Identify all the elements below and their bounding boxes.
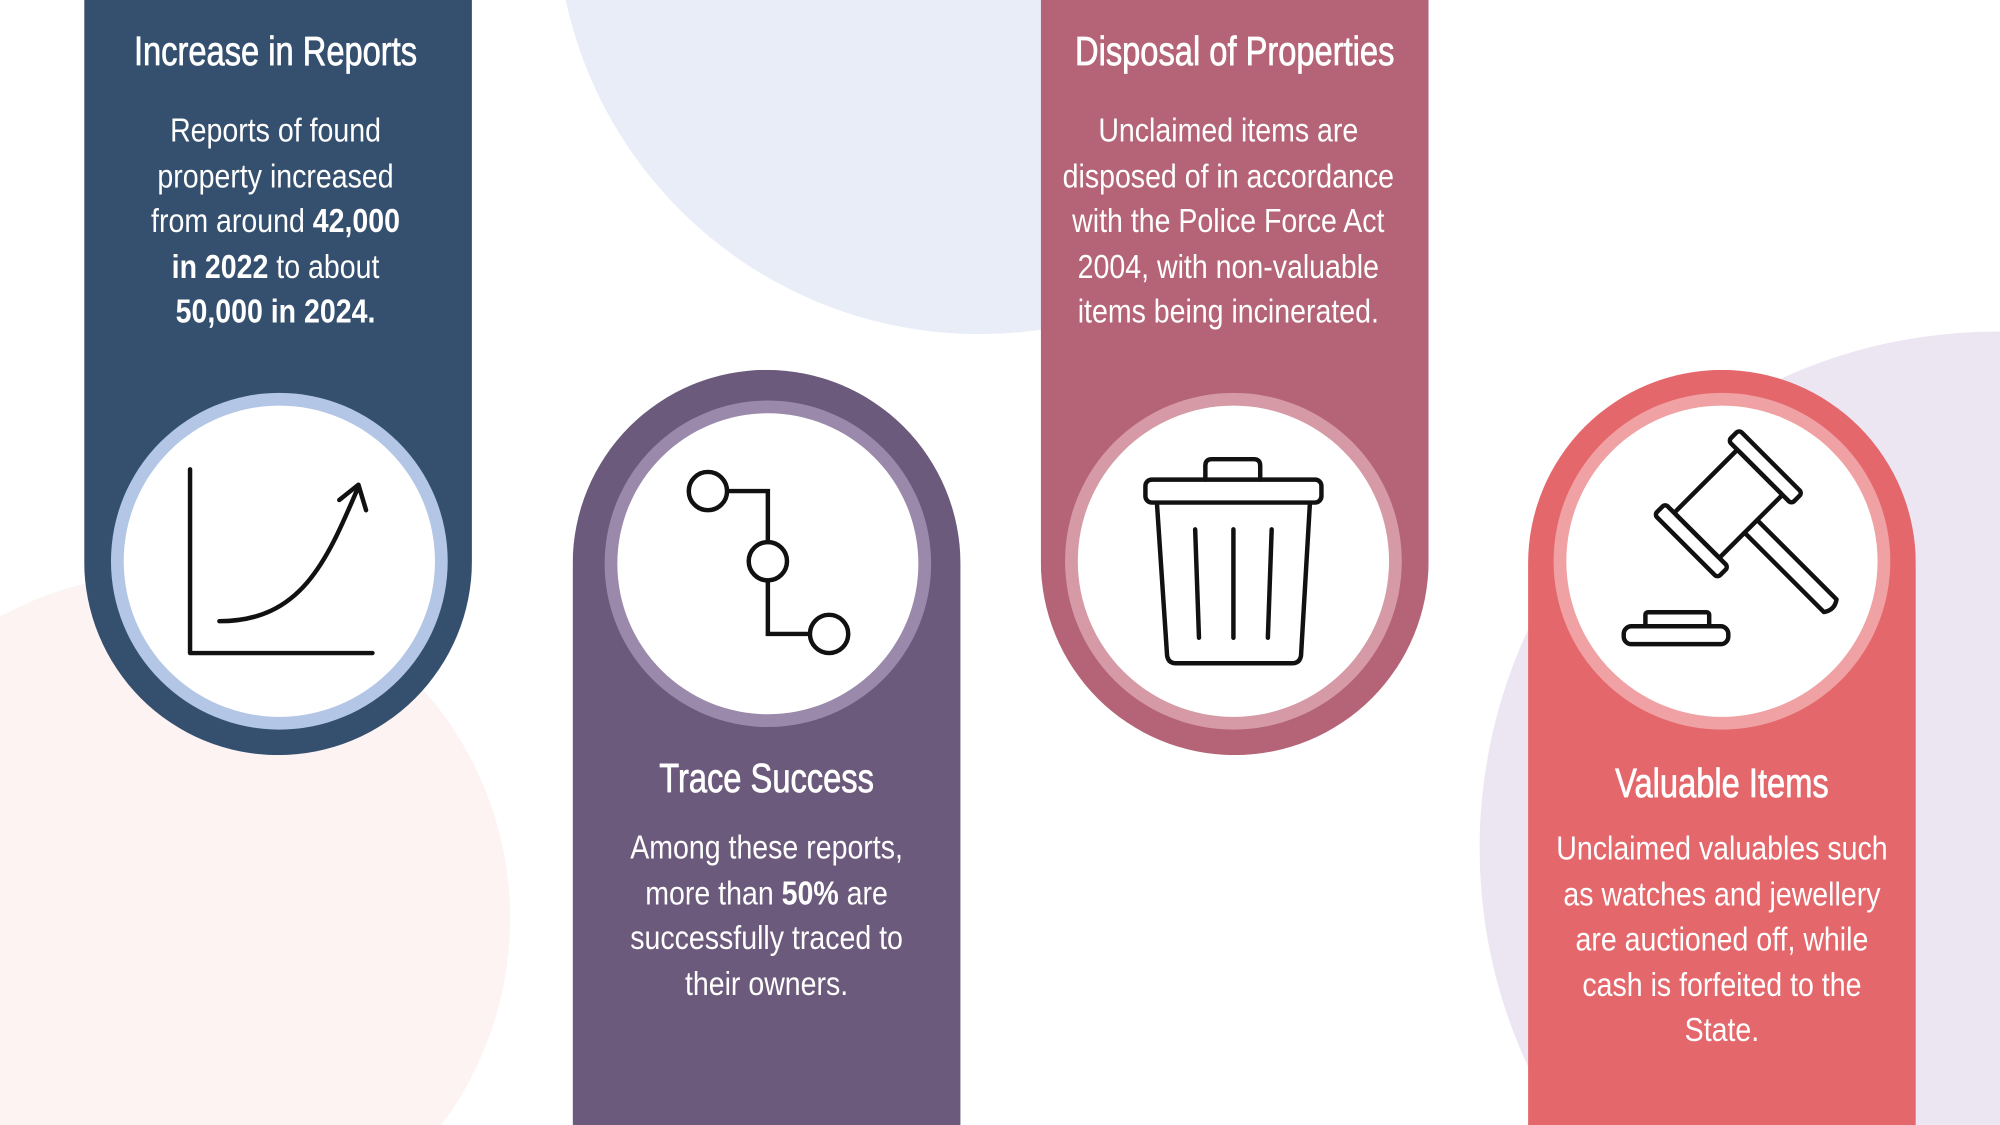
icon: path nodes [686, 470, 850, 656]
text: increase in reports: property increased [157, 156, 394, 195]
title: disposal of properties: Disposal of Properties [1075, 28, 1394, 74]
text: increase in reports: from around 42,000 [151, 202, 400, 240]
text: trace success: their owners. [685, 964, 848, 1002]
title: trace success: Trace Success [659, 755, 874, 801]
text: disposal of properties: items being incinerated. [1078, 292, 1379, 330]
text: increase in reports: Reports of found [170, 111, 381, 149]
text: disposal of properties: 2004, with non-valuable [1078, 247, 1379, 285]
icon: growth chart [188, 467, 375, 656]
text: disposal of properties [1063, 111, 1394, 330]
text: disposal of properties: with the Police Force Act [1072, 202, 1384, 240]
text: increase in reports: in 2022 to about [172, 247, 379, 285]
panel: valuable items [1528, 370, 1916, 1125]
icon: trash can [1143, 457, 1324, 666]
icon: gavel [1622, 429, 1839, 646]
text: valuable items: Unclaimed valuables such [1556, 829, 1888, 867]
text: trace success: more than 50% are [645, 873, 888, 911]
title: increase in reports: Increase in Reports [134, 28, 417, 74]
text: disposal of properties: disposed of in accordance [1063, 156, 1394, 195]
text: trace success: Among these reports, [630, 828, 903, 866]
text: disposal of properties: Unclaimed items are [1098, 111, 1358, 149]
text: valuable items [1556, 829, 1888, 1048]
text: trace success: successfully traced to [630, 918, 903, 957]
text: valuable items: State. [1685, 1010, 1759, 1048]
text: valuable items: as watches and jewellery [1563, 874, 1880, 913]
text: increase in reports [151, 111, 400, 330]
panel: trace success [572, 370, 960, 1125]
panel: increase in reports [84, 0, 472, 756]
text: increase in reports: 50,000 in 2024. [176, 292, 375, 330]
title: valuable items: Valuable Items [1615, 760, 1829, 806]
text: valuable items: are auctioned off, while [1576, 920, 1868, 958]
panel: disposal of properties [1040, 0, 1428, 756]
text: trace success [630, 828, 903, 1002]
text: valuable items: cash is forfeited to the [1582, 965, 1861, 1003]
